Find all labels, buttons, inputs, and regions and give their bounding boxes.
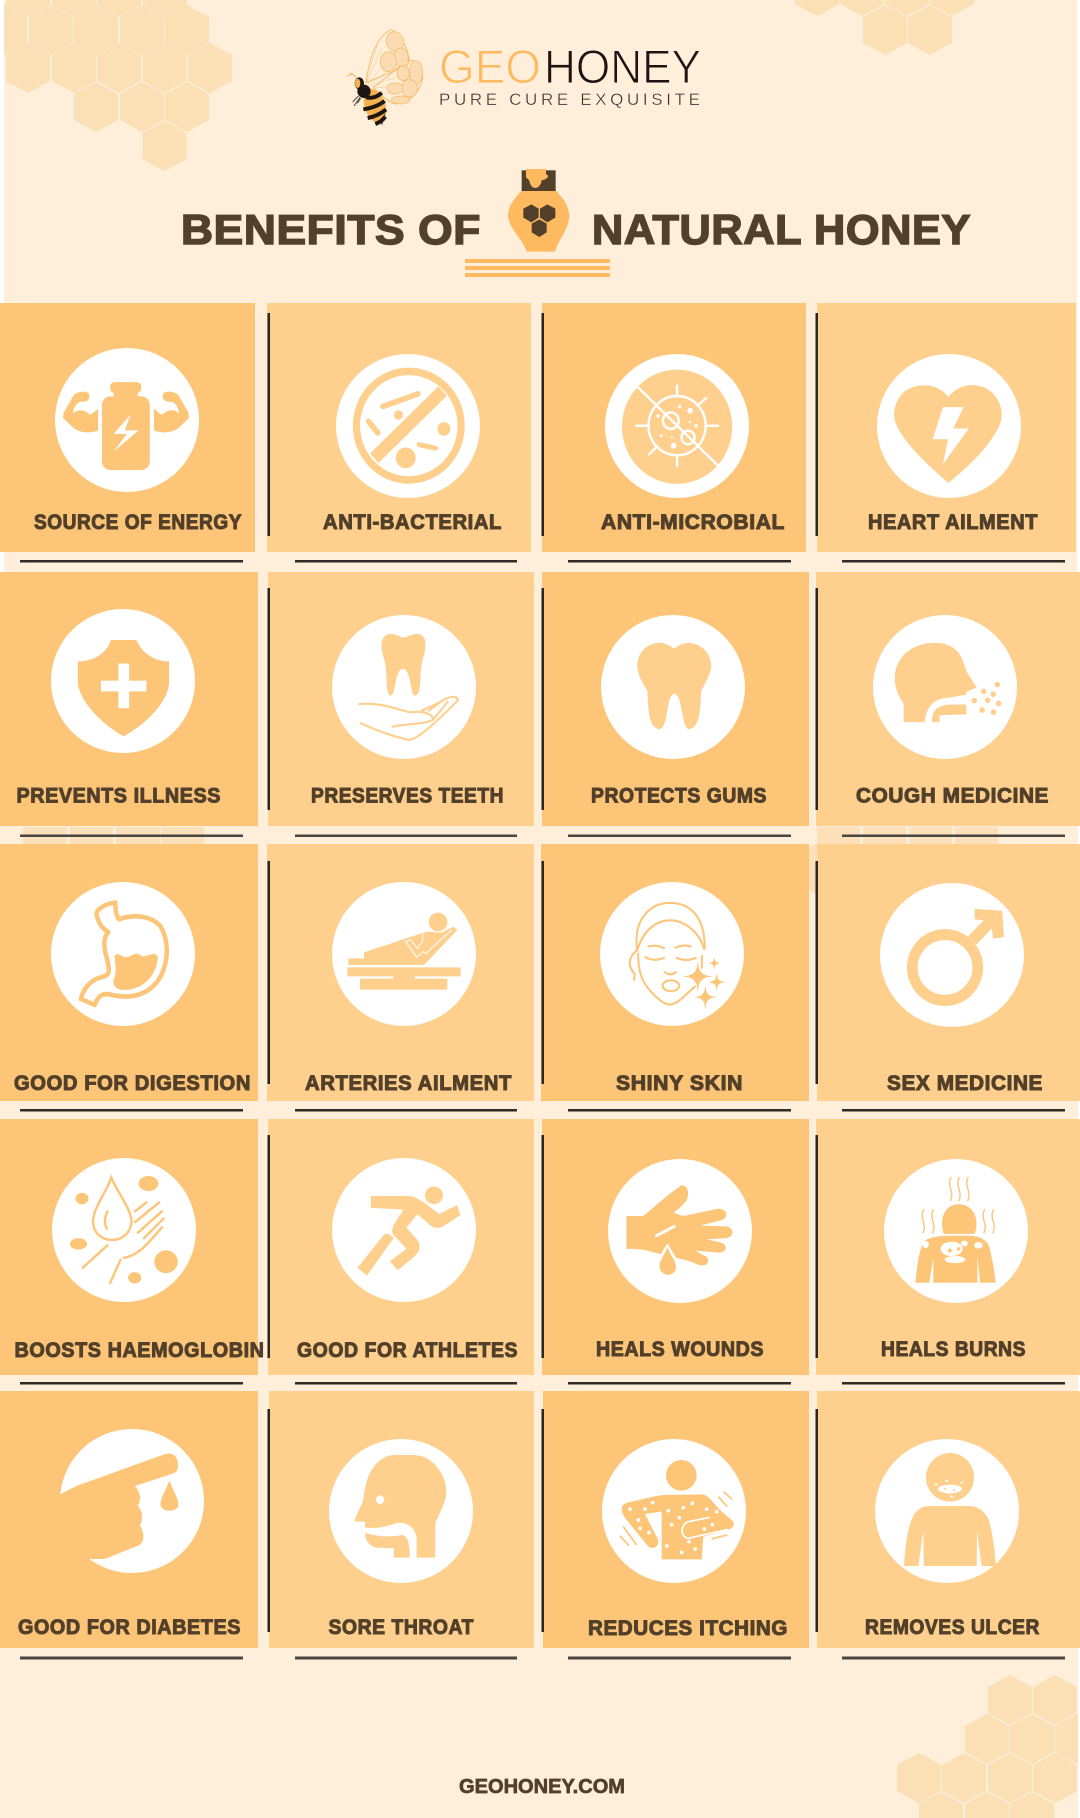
heading: benefits of: BENEFITS OF — [181, 206, 481, 253]
title — [181, 169, 971, 277]
background — [543, 1391, 809, 1648]
icon: finger with blood drop — [41, 1429, 204, 1573]
label: SEX MEDICINE — [887, 1072, 1043, 1095]
icon: itchy person — [602, 1439, 746, 1583]
label: REDUCES ITCHING — [588, 1617, 788, 1640]
icon: no microbes — [605, 354, 749, 498]
panel: shiny skin — [541, 844, 809, 1101]
panel: prevents illness — [0, 572, 258, 826]
icon: patient on bed — [332, 882, 476, 1026]
background — [817, 1391, 1080, 1648]
label: SORE THROAT — [328, 1616, 474, 1639]
honeycomb: bottom right — [897, 1675, 1080, 1818]
heading: natural honey: NATURAL HONEY — [592, 206, 971, 253]
panel: protects gums — [542, 572, 809, 826]
panel: anti-microbial — [542, 303, 806, 552]
panel: good for diabetes — [0, 1391, 258, 1648]
icon: runner — [332, 1158, 476, 1302]
background — [0, 844, 258, 1101]
icon: stomach — [51, 882, 195, 1026]
icon: honey bottle — [508, 169, 569, 252]
panel: source of energy — [0, 303, 255, 552]
icon: tooth on hand — [332, 615, 476, 759]
panel: heals wounds — [542, 1119, 809, 1375]
label: ANTI-BACTERIAL — [323, 511, 502, 534]
panel: sore throat — [269, 1391, 534, 1648]
icon: shield with cross — [51, 609, 195, 753]
label: SHINY SKIN — [616, 1072, 743, 1095]
background — [816, 1119, 1080, 1375]
label: REMOVES ULCER — [865, 1616, 1040, 1639]
panel: cough medicine — [816, 572, 1080, 826]
icon: burned person — [884, 1159, 1028, 1303]
label: GOOD FOR DIGESTION — [14, 1072, 251, 1095]
background — [541, 844, 809, 1101]
label: HEALS BURNS — [881, 1338, 1026, 1361]
background — [268, 572, 534, 826]
label: PROTECTS GUMS — [591, 784, 767, 808]
honeycomb: top right — [795, 0, 974, 55]
icon: muscular battery — [55, 348, 199, 492]
background — [0, 572, 258, 826]
panel: arteries ailment — [267, 844, 534, 1101]
background — [0, 303, 255, 552]
icon: coughing head — [873, 615, 1017, 759]
background — [542, 303, 806, 552]
label: HEALS WOUNDS — [596, 1338, 764, 1361]
background — [816, 572, 1080, 826]
label: SOURCE OF ENERGY — [34, 511, 242, 534]
icon: blood drop and hand — [52, 1158, 196, 1302]
panel: boosts haemoglobin — [0, 1119, 264, 1375]
label: BOOSTS HAEMOGLOBIN — [14, 1339, 264, 1362]
honeycomb: top left — [0, 0, 232, 171]
faint honeycomb strips between rows — [23, 827, 998, 895]
icon: wounded hand — [608, 1159, 752, 1303]
icon: male symbol — [880, 883, 1024, 1027]
tagline: PURE CURE EXQUISITE — [439, 90, 700, 109]
background — [267, 303, 531, 552]
icon: glowing face — [600, 882, 744, 1026]
icon: person with mouth ulcer — [875, 1439, 1019, 1583]
background — [267, 844, 534, 1101]
icon: molar tooth — [601, 615, 745, 759]
label: PRESERVES TEETH — [311, 784, 504, 808]
panel: reduces itching — [543, 1391, 809, 1648]
panel: preserves teeth — [268, 572, 534, 826]
footer url: GEOHONEY.COM — [459, 1776, 625, 1798]
panel: anti-bacterial — [267, 303, 531, 552]
background — [0, 1119, 258, 1375]
background — [0, 1391, 258, 1648]
icon: no bacteria — [336, 354, 480, 498]
panel: good for athletes — [268, 1119, 534, 1375]
logo: Geohoney bee and wordmark — [347, 29, 701, 126]
underline stripes — [465, 259, 610, 277]
icon: head with throat — [329, 1439, 473, 1583]
label: HEART AILMENT — [868, 511, 1038, 534]
background — [268, 1119, 534, 1375]
background — [817, 303, 1076, 552]
panel: good for digestion — [0, 844, 258, 1101]
label: ARTERIES AILMENT — [305, 1072, 512, 1095]
wordmark HONEY: HONEY — [544, 40, 701, 93]
wordmark GEO: GEO — [439, 40, 541, 93]
panel: removes ulcer — [817, 1391, 1080, 1648]
panel: heals burns — [816, 1119, 1080, 1375]
panel: sex medicine — [817, 844, 1080, 1101]
label: COUGH MEDICINE — [856, 784, 1049, 808]
icon: heart with bolt — [877, 354, 1021, 498]
label: ANTI-MICROBIAL — [601, 511, 785, 534]
panel: heart ailment — [817, 303, 1076, 552]
label: PREVENTS ILLNESS — [16, 784, 221, 808]
icon: bee — [347, 29, 423, 126]
background — [269, 1391, 534, 1648]
background — [542, 1119, 809, 1375]
background — [817, 844, 1080, 1101]
label: GOOD FOR ATHLETES — [297, 1339, 518, 1362]
label: GOOD FOR DIABETES — [18, 1616, 241, 1639]
background — [542, 572, 809, 826]
